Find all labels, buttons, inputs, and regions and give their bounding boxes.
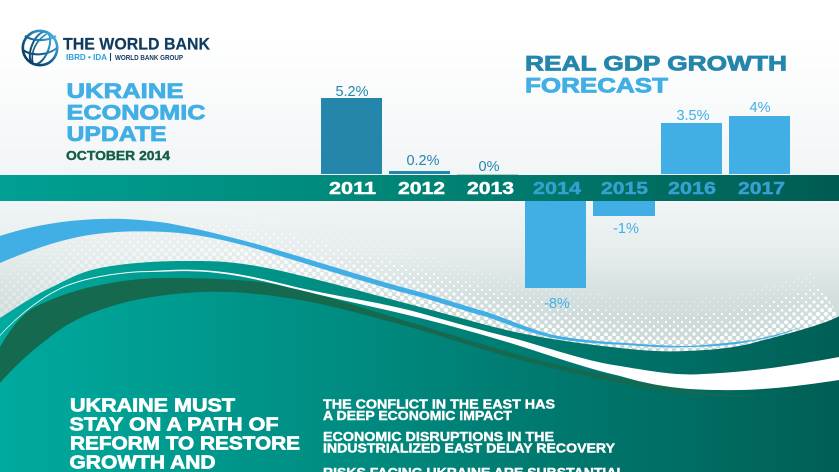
value labels: -8% xyxy=(544,296,570,312)
bar 2016 xyxy=(661,123,722,174)
title: Ukraine Economic Update: ECONOMIC xyxy=(66,100,206,124)
teal wave panel xyxy=(0,261,839,472)
year labels: 2016 xyxy=(668,178,716,198)
text block: reform headline: UKRAINE MUST xyxy=(70,394,236,416)
bar chart: real GDP growth xyxy=(321,84,790,312)
chart heading: Real GDP Growth Forecast: FORECAST xyxy=(525,74,668,98)
blue wave swoosh xyxy=(0,219,803,347)
value labels: 3.5% xyxy=(676,108,710,124)
bar 2015 xyxy=(593,201,655,216)
background: lower panel xyxy=(0,201,839,353)
horizontal year band xyxy=(0,175,839,201)
logo tagline: World Bank Group: WORLD BANK GROUP xyxy=(115,53,183,62)
text block: key messages: ECONOMIC DISRUPTIONS IN THE xyxy=(323,430,554,444)
bar 2017 xyxy=(729,116,790,174)
background: upper panel xyxy=(0,0,839,176)
dark green wave stripe xyxy=(0,278,760,397)
year labels: 2014 xyxy=(533,178,581,198)
icon: globe xyxy=(23,29,57,67)
text block: key messages: THE CONFLICT IN THE EAST HAS xyxy=(323,398,555,412)
halftone dot texture xyxy=(0,261,839,351)
year labels: 2012 xyxy=(398,178,445,198)
bar 2014 xyxy=(525,201,586,288)
white wave stripe xyxy=(0,270,839,390)
value labels: 0.2% xyxy=(406,153,440,169)
value labels: -1% xyxy=(613,221,639,237)
text block: reform headline: GROWTH AND xyxy=(70,452,216,472)
bar 2013 xyxy=(457,174,518,175)
text block: reform headline xyxy=(70,394,300,472)
text block: key messages: INDUSTRIALIZED EAST DELAY RECOVERY xyxy=(323,442,616,456)
year labels: 2011 xyxy=(329,178,376,198)
text block: reform headline: STAY ON A PATH OF xyxy=(70,414,278,434)
title: Ukraine Economic Update: UKRAINE xyxy=(66,79,184,103)
year labels: 2015 xyxy=(601,178,648,198)
text block: reform headline: REFORM TO RESTORE xyxy=(70,432,300,454)
year labels xyxy=(329,178,785,198)
year labels: 2017 xyxy=(738,178,785,198)
value labels xyxy=(335,84,771,312)
bar 2011 xyxy=(321,98,382,174)
chart heading: Real GDP Growth Forecast xyxy=(525,52,787,98)
logo tagline: IBRD IDA: IBRD • IDA xyxy=(66,52,107,62)
logo wordmark: THE WORLD BANK xyxy=(63,34,211,54)
title: Ukraine Economic Update xyxy=(66,79,206,146)
text block: key messages: A DEEP ECONOMIC IMPACT xyxy=(323,409,512,423)
logo divider xyxy=(110,53,111,61)
chart heading: Real GDP Growth Forecast: REAL GDP GROWTH xyxy=(525,52,787,76)
value labels: 5.2% xyxy=(335,84,369,100)
value labels: 0% xyxy=(479,159,500,175)
date: October 2014: OCTOBER 2014 xyxy=(66,149,170,163)
text block: key messages xyxy=(323,398,625,472)
year labels: 2013 xyxy=(467,178,514,198)
bar 2012 xyxy=(389,171,450,174)
title: Ukraine Economic Update: UPDATE xyxy=(66,122,166,146)
value labels: 4% xyxy=(750,100,771,116)
logo: The World Bank xyxy=(23,29,211,67)
